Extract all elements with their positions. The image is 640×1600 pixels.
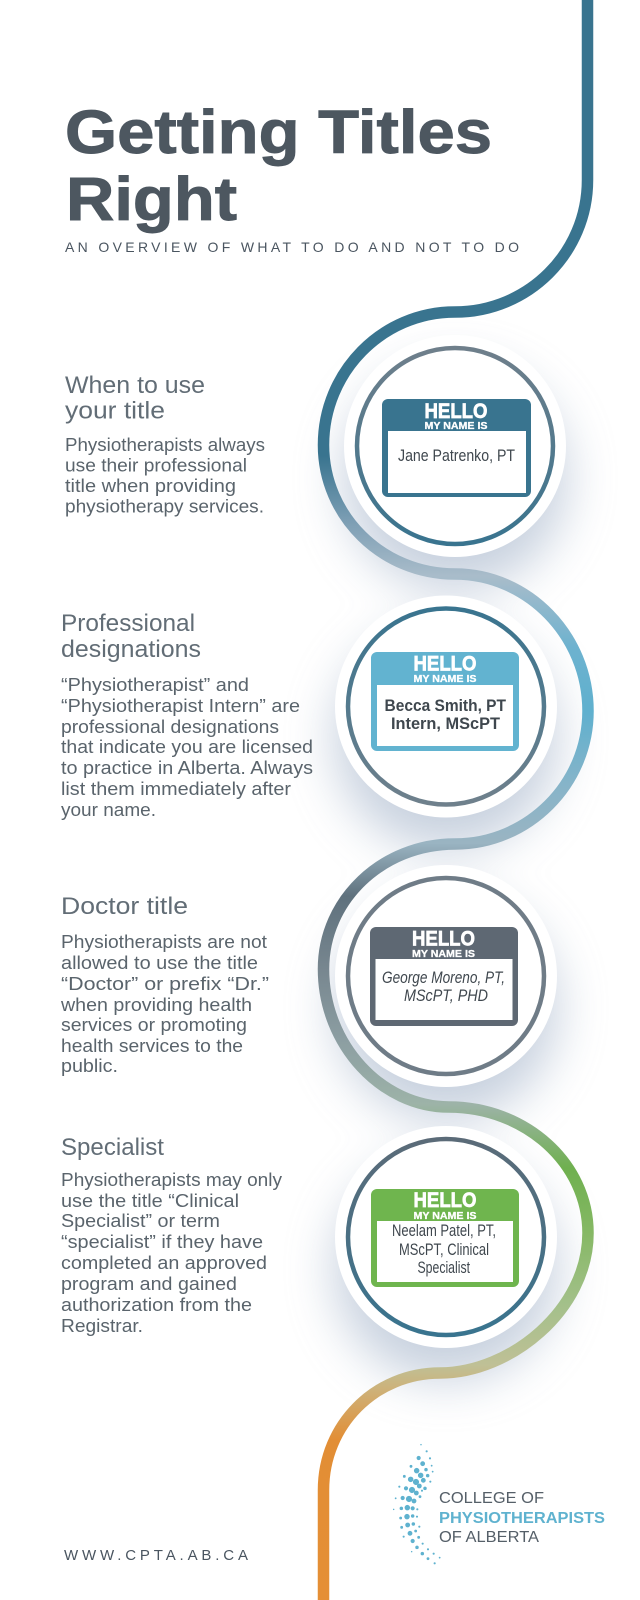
badge circle 1	[344, 335, 566, 557]
name tag: Neelam Patel	[371, 1189, 519, 1287]
shadows under discs	[334, 366, 567, 1381]
logo wordmark: OF ALBERTA	[439, 1529, 539, 1546]
body text: professional designations: to practice in Alberta. Always	[61, 758, 313, 778]
body text: doctor title: “Doctor” or prefix “Dr.”	[61, 974, 269, 994]
name tag: Becca Smith: MY NAME IS	[414, 674, 477, 685]
badge circle 2	[335, 596, 557, 818]
logo dots	[393, 1444, 440, 1564]
title: Right	[66, 165, 237, 233]
body text: professional designations: professional designations	[61, 717, 279, 737]
name tag: Jane Patrenko	[382, 399, 531, 497]
winding gradient path	[324, 0, 588, 1600]
body text: professional designations: “Physiotherapist Intern” are	[61, 696, 300, 716]
section: specialist	[61, 1134, 282, 1336]
name tag: Neelam Patel: Specialist	[418, 1258, 470, 1277]
body text: doctor title: Physiotherapists are not	[61, 932, 267, 952]
heading: professional designations: Professional	[61, 610, 195, 637]
name tag: Jane Patrenko: Jane Patrenko, PT	[398, 446, 515, 465]
body text: specialist: completed an approved	[61, 1253, 267, 1273]
heading: professional designations: designations	[61, 636, 201, 663]
name tag: Jane Patrenko: HELLO	[424, 400, 488, 423]
body text: specialist	[61, 1170, 282, 1336]
website address: WWW.CPTA.AB.CA	[64, 1547, 248, 1564]
heading: when to use your title	[65, 372, 205, 424]
body text: specialist: Physiotherapists may only	[61, 1170, 282, 1190]
body text: doctor title: when providing health	[60, 995, 252, 1015]
body text: professional designations: list them immediately after	[61, 779, 291, 799]
body text: when to use: title when providing	[65, 476, 236, 496]
name tag: George Moreno: George Moreno, PT,	[382, 968, 505, 987]
body text: when to use: Physiotherapists always	[65, 435, 265, 455]
body text: doctor title: allowed to use the title	[61, 953, 258, 973]
name tag: Becca Smith	[371, 652, 519, 751]
name tag: George Moreno	[370, 927, 518, 1026]
body text: specialist: authorization from the	[61, 1295, 252, 1315]
body text: when to use: physiotherapy services.	[65, 496, 264, 516]
body text: professional designations	[61, 675, 313, 820]
title: Getting Titles	[65, 98, 492, 166]
logo wordmark	[439, 1490, 605, 1546]
subtitle: AN OVERVIEW OF WHAT TO DO AND NOT TO DO	[65, 239, 519, 255]
name tag: Becca Smith: HELLO	[414, 652, 476, 676]
name tag: Becca Smith: Becca Smith, PT	[384, 696, 507, 715]
title	[65, 98, 492, 233]
name tag: George Moreno: MY NAME IS	[412, 949, 475, 960]
name tag: Becca Smith: Intern, MScPT	[391, 714, 501, 733]
body text: doctor title	[60, 932, 269, 1076]
body text: when to use	[65, 435, 265, 516]
logo wordmark: COLLEGE OF	[439, 1490, 544, 1507]
logo wordmark: PHYSIOTHERAPISTS	[439, 1510, 605, 1527]
name tag: Neelam Patel: MScPT, Clinical	[399, 1240, 489, 1259]
name tag: Neelam Patel: Neelam Patel, PT,	[392, 1221, 496, 1240]
section: when to use your title	[65, 372, 265, 516]
name tag: Neelam Patel: MY NAME IS	[414, 1211, 477, 1222]
logo: College of Physiotherapists of Alberta	[393, 1444, 605, 1564]
name tag: George Moreno: MScPT, PHD	[404, 986, 488, 1005]
section: professional designations	[61, 610, 313, 820]
heading: professional designations	[61, 610, 201, 663]
body text: specialist: use the title “Clinical	[61, 1191, 239, 1211]
body text: specialist: “specialist” if they have	[61, 1232, 263, 1252]
badge circle 3	[335, 865, 557, 1087]
body text: specialist: Specialist” or term	[61, 1211, 220, 1231]
name tag: George Moreno: HELLO	[412, 928, 475, 950]
body text: doctor title: services or promoting	[61, 1015, 247, 1035]
name tag: Neelam Patel: HELLO	[414, 1189, 476, 1212]
badge circle 4	[335, 1126, 557, 1348]
body text: when to use: use their professional	[65, 456, 247, 476]
heading: when to use your title: your title	[65, 398, 165, 424]
body text: doctor title: health services to the	[61, 1036, 243, 1056]
heading: specialist: Specialist	[61, 1134, 164, 1161]
body text: professional designations: your name.	[61, 800, 156, 820]
body text: specialist: program and gained	[61, 1274, 237, 1294]
name tag: Jane Patrenko: MY NAME IS	[424, 421, 488, 432]
body text: professional designations: that indicate you are licensed	[61, 737, 313, 757]
body text: professional designations: “Physiotherapist” and	[61, 675, 249, 695]
section: doctor title	[60, 893, 269, 1076]
body text: specialist: Registrar.	[61, 1316, 143, 1336]
heading: when to use your title: When to use	[65, 372, 205, 399]
body text: doctor title: public.	[61, 1056, 118, 1076]
heading: doctor title: Doctor title	[61, 893, 188, 920]
